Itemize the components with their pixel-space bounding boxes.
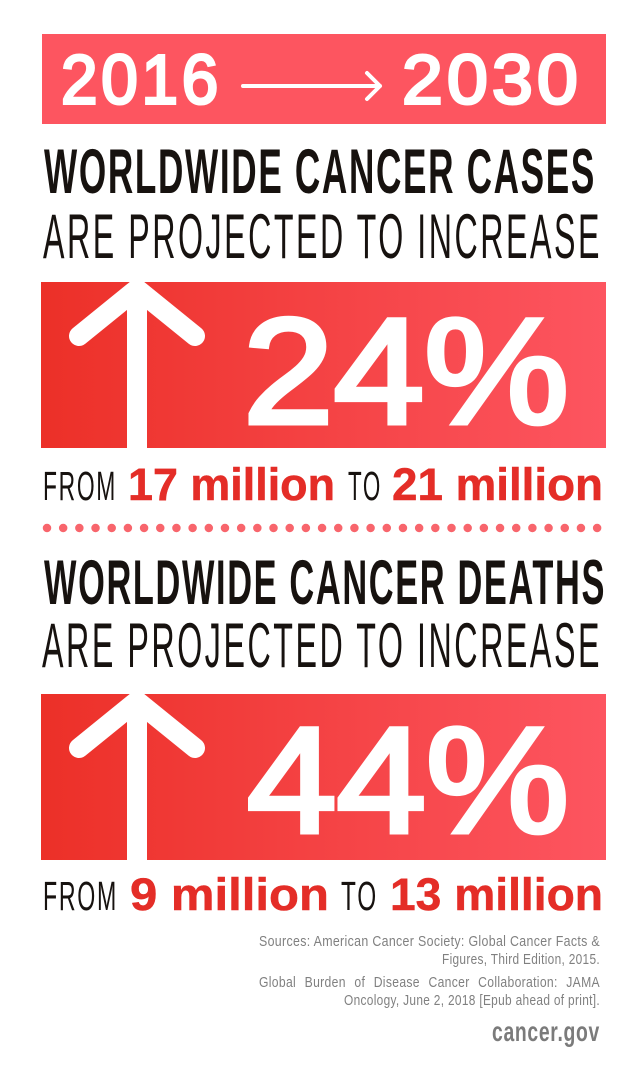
text: from 17 million to 21 million: FROM — [43, 463, 117, 509]
panel: 44 percent increase: 44% — [247, 696, 569, 864]
text: from 17 million to 21 million: 17 million — [128, 459, 335, 510]
icon: up arrow — [79, 289, 195, 448]
text: from 17 million to 21 million: 21 million — [392, 459, 603, 510]
text: from 9 million to 13 million: 9 million — [130, 869, 329, 920]
text: from 9 million to 13 million: 13 million — [390, 869, 603, 920]
text block: sources — [259, 933, 600, 1009]
panel: 24 percent increase — [41, 282, 606, 455]
text: from 9 million to 13 million: TO — [341, 873, 378, 919]
icon: thin right arrow — [243, 73, 380, 99]
banner: 2016 to 2030 — [42, 34, 606, 124]
dotted divider — [47, 524, 598, 532]
panel: 24 percent increase: 24% — [243, 287, 569, 455]
icon: up arrow — [79, 701, 195, 860]
text: from 17 million to 21 million — [43, 459, 603, 510]
text: from 17 million to 21 million: TO — [348, 463, 382, 509]
text block: sources: Figures, Third Edition, 2015. — [442, 951, 600, 968]
banner: 2016 to 2030: 2030 — [402, 40, 582, 118]
panel: 44 percent increase — [41, 694, 606, 864]
banner: 2016 to 2030: 2016 — [61, 40, 222, 118]
text: from 9 million to 13 million: FROM — [43, 873, 118, 919]
text: from 9 million to 13 million — [43, 869, 603, 920]
